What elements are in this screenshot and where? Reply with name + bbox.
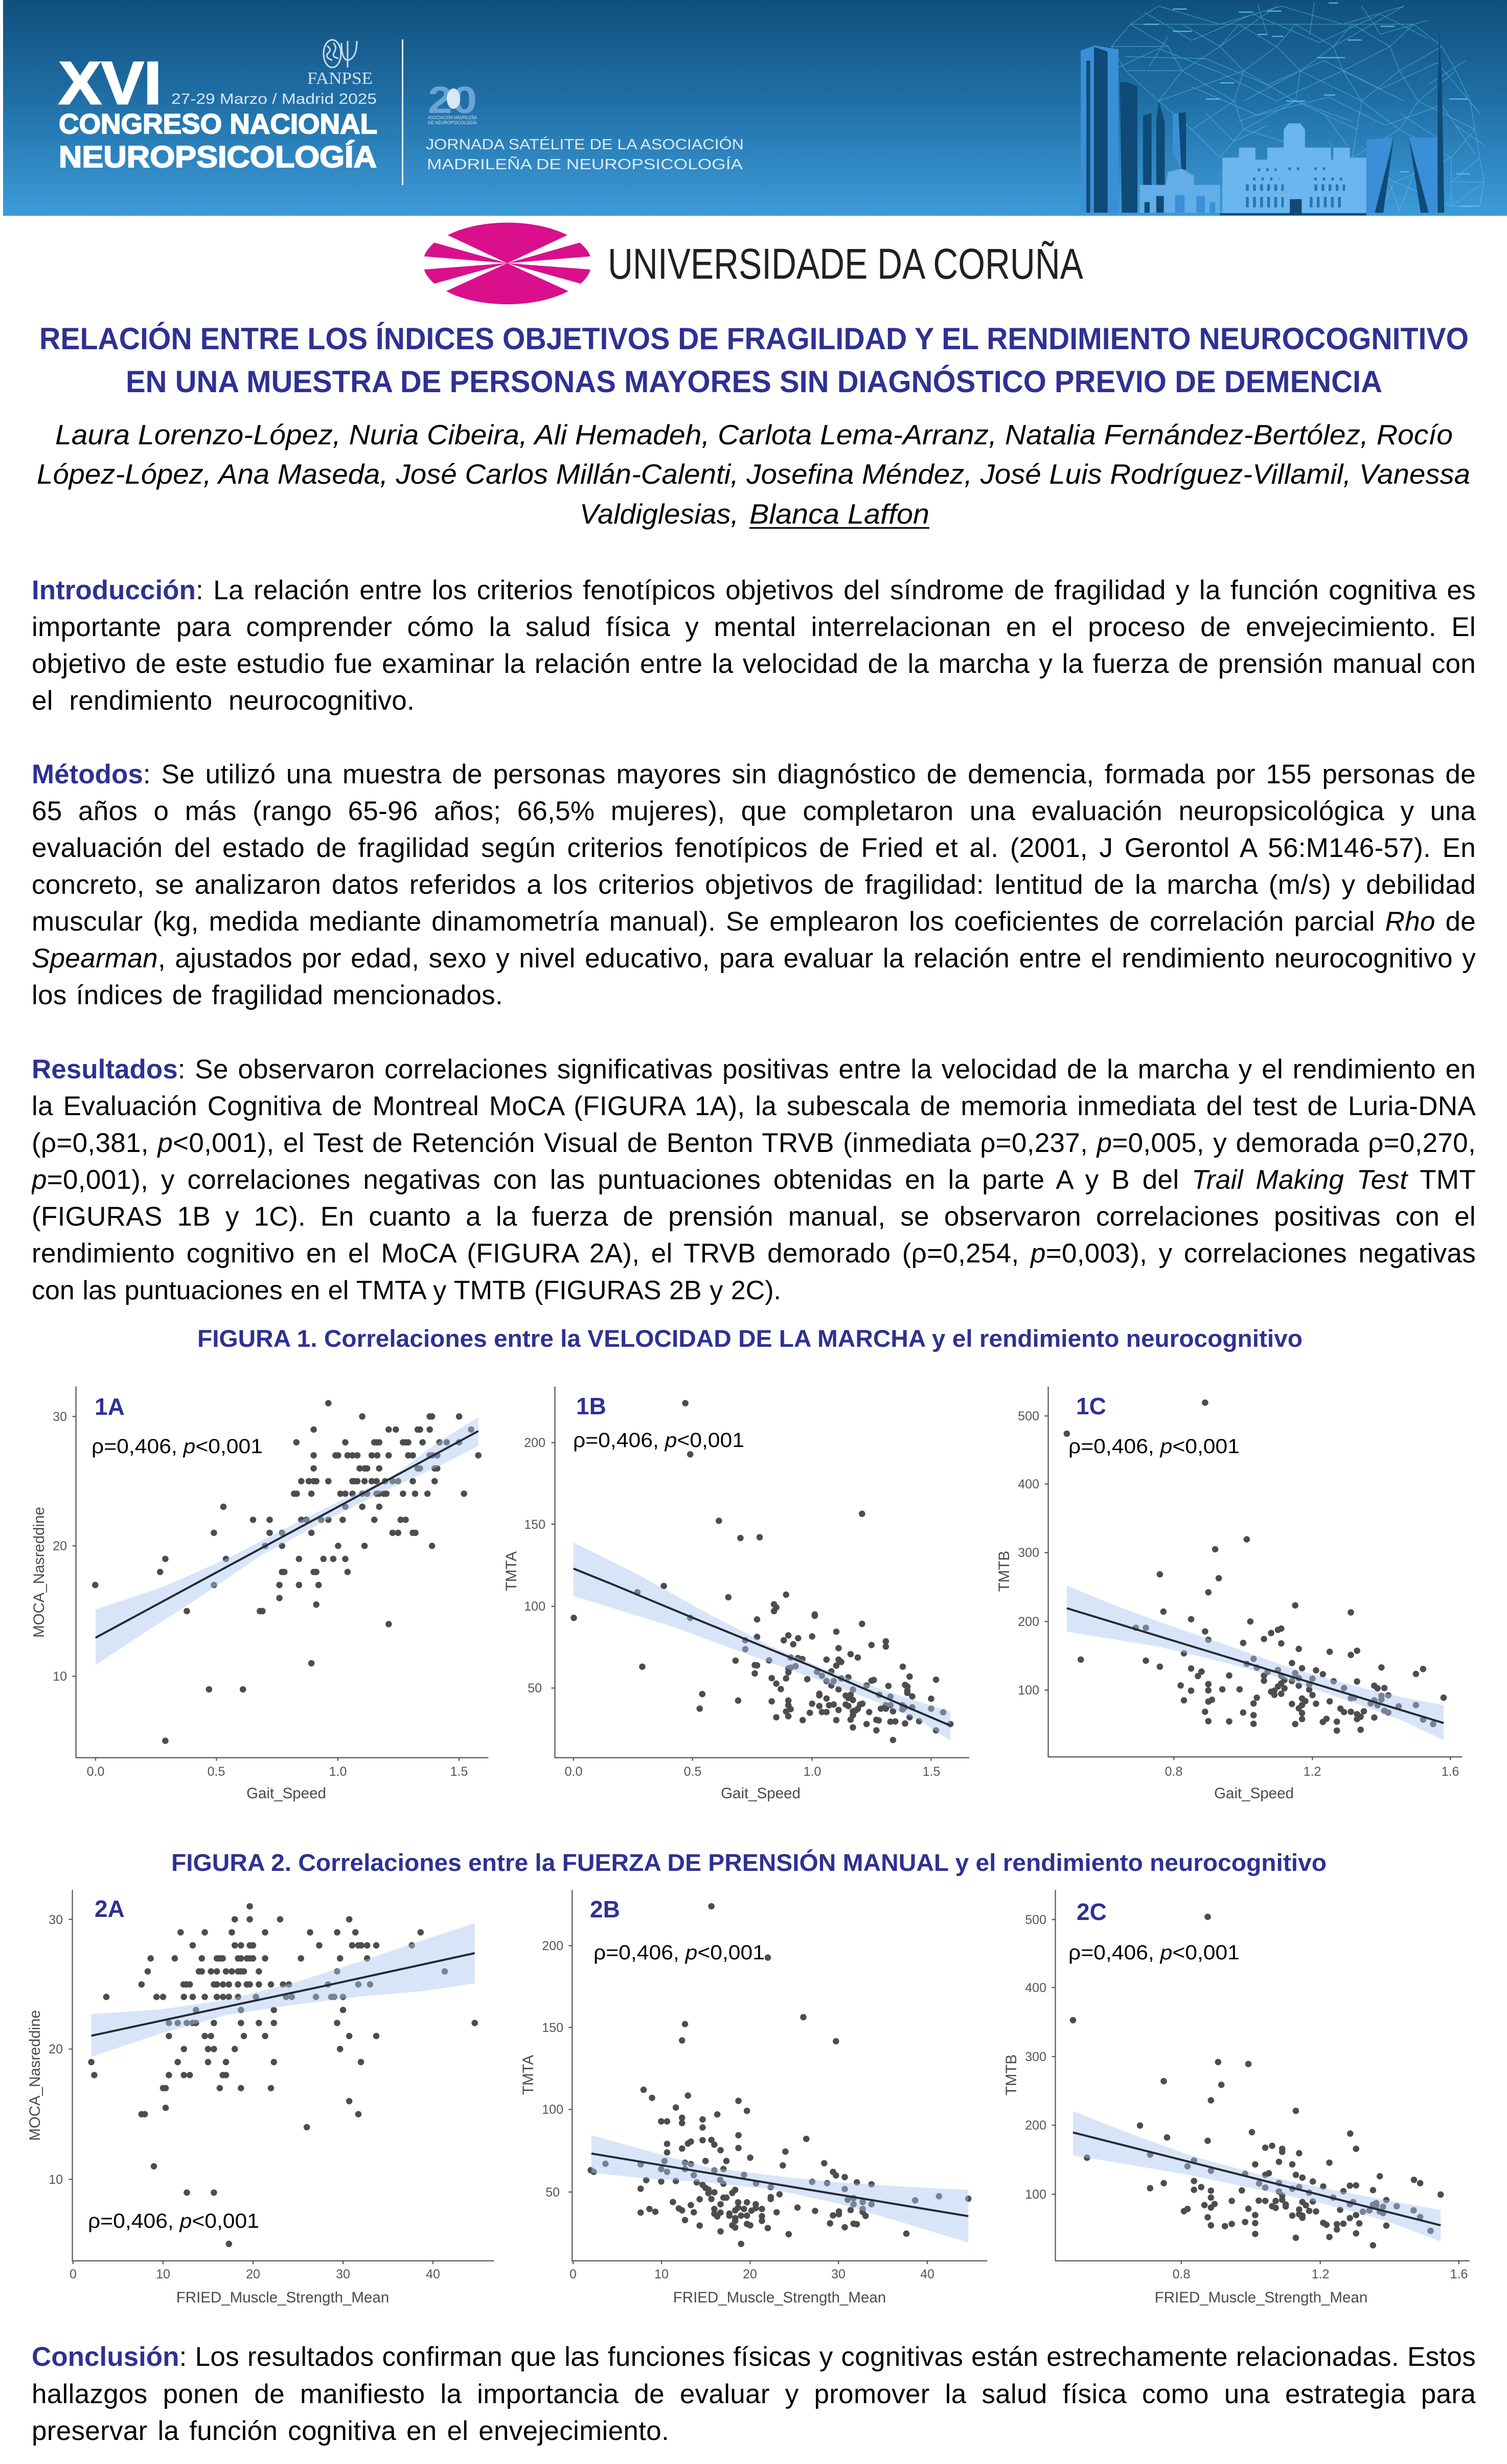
y axis title: MOCA_Nasreddine	[31, 1507, 48, 1638]
header artwork and congress text	[58, 2, 1485, 216]
y tick labels: 300	[1025, 2050, 1046, 2064]
x tick labels: 0.8	[1173, 2267, 1190, 2281]
axes and ticks	[69, 1890, 494, 2264]
axes and ticks	[1045, 1387, 1462, 1760]
y tick labels: 400	[1025, 1981, 1046, 1995]
y tick labels: 10	[53, 1669, 67, 1684]
panel tag: 1A	[95, 1393, 125, 1420]
axes and ticks	[1052, 1890, 1470, 2264]
x axis title: Gait_Speed	[1214, 1785, 1294, 1802]
y tick labels: 200	[542, 1939, 563, 1953]
correlation label: ρ=0,406, p<0,001	[1068, 1941, 1240, 1964]
conclusion text: Conclusión: Los resultados confirman que las funciones físicas y cognitivas están estrechamente relacionadas. Estos	[32, 2342, 1476, 2372]
chart 2C: muscle strength vs TMTB	[997, 1882, 1507, 2316]
y tick labels: 150	[542, 2021, 563, 2035]
icon: 20 years logo: 20	[428, 79, 477, 121]
results text: p=0,001), y correlaciones negativas con las puntuaciones obtenidas en la parte A y B del Trail Making Test TMT	[32, 1165, 1476, 1195]
results text: rendimiento cognitivo en el MoCA (FIGURA 2A), el TRVB demorado (ρ=0,254, p=0,003), y correlaciones negativas	[32, 1238, 1476, 1269]
y tick labels	[49, 1913, 63, 2187]
x tick labels: 0.5	[208, 1765, 225, 1779]
x tick labels: 40	[920, 2267, 934, 2281]
scatter points	[92, 1906, 475, 2244]
results text: (ρ=0,381, p<0,001), el Test de Retención Visual de Benton TRVB (inmediata ρ=0,237, p=0,005, y demorada ρ=0,270,	[32, 1128, 1476, 1158]
x tick labels: 1.5	[450, 1765, 468, 1779]
satellite session line 1: JORNADA SATÉLITE DE LA ASOCIACIÓN	[426, 136, 744, 153]
y axis title: TMTB	[996, 1551, 1013, 1592]
x tick labels: 20	[246, 2267, 260, 2281]
icon: 20 years logo: DE NEUROPSICOLOGÍA	[428, 120, 477, 125]
confidence band	[591, 2135, 968, 2243]
results text	[32, 1054, 1476, 1305]
regression line	[96, 1431, 478, 1638]
correlation label: ρ=0,406, p<0,001	[88, 2210, 259, 2232]
introduction text: importante para comprender cómo la salud física y mental interrelacionan en el proceso de envejecimiento. El	[32, 612, 1476, 642]
y tick labels: 400	[1018, 1477, 1039, 1491]
scatter points	[574, 1403, 950, 1740]
x tick labels: 10	[654, 2267, 669, 2281]
chart 2B: muscle strength vs TMTA	[511, 1882, 997, 2316]
conclusion text	[32, 2339, 1476, 2450]
panel tag: 2B	[590, 1896, 620, 1923]
correlation label: ρ=0,406, p<0,001	[92, 1435, 263, 1458]
x tick labels: 1.0	[329, 1765, 347, 1779]
x tick labels	[1173, 2267, 1468, 2281]
y tick labels: 20	[53, 1539, 67, 1553]
methods text: evaluación del estado de fragilidad según criterios fenotípicos de Fried et al. (2001, J Gerontol A 56:M146-57). En	[32, 833, 1476, 863]
x tick labels: 40	[426, 2267, 440, 2281]
x tick labels: 0	[70, 2267, 77, 2281]
methods text: los índices de fragilidad mencionados.	[32, 980, 503, 1010]
axes and ticks	[551, 1387, 969, 1761]
x tick labels: 0.0	[565, 1765, 582, 1779]
regression line	[574, 1569, 950, 1726]
title line 1: RELACIÓN ENTRE LOS ÍNDICES OBJETIVOS DE FRAGILIDAD Y EL RENDIMIENTO NEUROCOGNITIVO	[39, 322, 1469, 356]
y tick labels: 100	[1018, 1683, 1039, 1698]
methods text: concreto, se analizaron datos referidos a los criterios objetivos de fragilidad: lentitud de la marcha (m/s) y debilidad	[32, 870, 1476, 900]
figure 1 heading: FIGURA 1. Correlaciones entre la VELOCIDAD DE LA MARCHA y el rendimiento neurocognitivo	[197, 1325, 1303, 1352]
icon: UDC emblem	[424, 222, 590, 304]
presenting author: Blanca Laffon	[749, 498, 929, 530]
FANPSE wordmark: FANPSE	[307, 69, 373, 88]
introduction text: objetivo de este estudio fue examinar la relación entre la velocidad de la marcha y la fuerza de prensión manual con	[32, 649, 1476, 679]
x tick labels: 1.2	[1304, 1765, 1321, 1779]
y tick labels: 200	[1018, 1615, 1039, 1629]
methods text: muscular (kg, medida mediante dinamometría manual). Se emplearon los coeficientes de correlación parcial Rho de	[32, 907, 1476, 937]
y axis title: TMTA	[520, 2055, 537, 2095]
congress name line 1: CONGRESO NACIONAL	[59, 108, 377, 140]
panel tag: 1B	[576, 1393, 606, 1419]
authors line 2: López-López, Ana Maseda, José Carlos Millán-Calenti, Josefina Méndez, José Luis Rodríguez-Villamil, Vanessa	[37, 458, 1470, 490]
Madrid skyline illustration	[1081, 2, 1485, 215]
congress name line 2: NEUROPSICOLOGÍA	[59, 140, 377, 174]
regression line	[1073, 2133, 1441, 2225]
results text: la Evaluación Cognitiva de Montreal MoCA (FIGURA 1A), la subescala de memoria inmediata del test de Luria-DNA	[32, 1091, 1476, 1121]
y tick labels	[524, 1436, 545, 1696]
axes and ticks	[73, 1387, 488, 1761]
header banner	[3, 0, 1507, 216]
x axis title: FRIED_Muscle_Strength_Mean	[176, 2289, 389, 2306]
axes and ticks	[568, 1890, 987, 2264]
x tick labels: 1.2	[1312, 2267, 1329, 2281]
introduction text	[32, 575, 1476, 716]
y tick labels: 100	[524, 1599, 545, 1614]
methods text: Métodos: Se utilizó una muestra de personas mayores sin diagnóstico de demencia, formada por 155 personas de	[32, 759, 1476, 789]
confidence band	[1067, 1586, 1444, 1740]
y axis title: TMTB	[1003, 2054, 1020, 2095]
x axis title: Gait_Speed	[246, 1785, 326, 1802]
x tick labels: 0	[569, 2267, 577, 2281]
y tick labels: 20	[49, 2042, 63, 2056]
authors line 3: Valdiglesias,	[580, 498, 739, 530]
authors	[37, 419, 1470, 530]
university name: UNIVERSIDADE DA CORUÑA	[608, 240, 1083, 288]
regression line	[1067, 1608, 1444, 1723]
x tick labels: 1.5	[923, 1765, 940, 1779]
y tick labels	[1025, 1913, 1046, 2202]
x tick labels: 0.5	[684, 1765, 701, 1779]
y tick labels	[542, 1939, 563, 2200]
regression line	[92, 1953, 475, 2036]
scatter points	[591, 1906, 968, 2244]
confidence band	[96, 1417, 478, 1665]
regression line	[591, 2154, 968, 2216]
x tick labels	[70, 2267, 440, 2281]
x tick labels	[87, 1765, 468, 1779]
methods text	[32, 759, 1476, 1010]
x tick labels: 30	[336, 2267, 350, 2281]
confidence band	[574, 1543, 950, 1740]
poster title	[39, 322, 1469, 399]
panel tag: 2C	[1077, 1898, 1107, 1925]
y tick labels: 100	[542, 2103, 563, 2117]
conclusion text: hallazgos ponen de manifiesto la importancia de evaluar y promover la salud física como una estrategia para	[32, 2379, 1476, 2409]
correlation label: ρ=0,406, p<0,001	[1068, 1435, 1240, 1458]
conclusion text: preservar la función cognitiva en el envejecimiento.	[32, 2416, 669, 2446]
x tick labels: 20	[743, 2267, 757, 2281]
y axis title: MOCA_Nasreddine	[27, 2010, 43, 2141]
x tick labels: 10	[156, 2267, 170, 2281]
results text: con las puntuaciones en el TMTA y TMTB (FIGURAS 2B y 2C).	[32, 1276, 781, 1305]
chart 1A: gait speed vs MoCA	[31, 1387, 489, 1802]
x tick labels	[565, 1765, 940, 1779]
chart 2A: muscle strength vs MoCA	[0, 1882, 511, 2316]
x tick labels: 0.0	[87, 1765, 104, 1779]
x tick labels: 1.6	[1450, 2267, 1468, 2281]
chart 1B: gait speed vs TMTA	[503, 1387, 969, 1802]
y tick labels: 200	[1025, 2118, 1046, 2133]
x axis title: Gait_Speed	[721, 1785, 801, 1802]
y tick labels: 300	[1018, 1546, 1039, 1560]
network mesh	[1111, 2, 1485, 210]
y tick labels: 500	[1025, 1913, 1046, 1927]
x tick labels: 0.8	[1165, 1765, 1182, 1779]
introduction text: Introducción: La relación entre los criterios fenotípicos objetivos del síndrome de fragilidad y la función cognitiva es	[32, 575, 1476, 605]
figure 2 heading: FIGURA 2. Correlaciones entre la FUERZA DE PRENSIÓN MANUAL y el rendimiento neurocognitivo	[171, 1849, 1327, 1876]
Kio towers	[1366, 138, 1437, 213]
x tick labels	[1165, 1765, 1459, 1779]
correlation label: ρ=0,406, p<0,001	[573, 1429, 744, 1452]
vertical divider	[402, 39, 403, 185]
confidence band	[1073, 2111, 1441, 2242]
x tick labels: 30	[831, 2267, 846, 2281]
x tick labels	[569, 2267, 934, 2281]
y tick labels: 50	[528, 1681, 542, 1696]
y tick labels	[53, 1410, 67, 1684]
icon: FANPSE brain and psi	[324, 40, 357, 67]
x tick labels: 1.0	[804, 1765, 821, 1779]
scatter points	[1073, 1917, 1441, 2245]
y tick labels: 100	[1025, 2187, 1046, 2202]
authors line 1: Laura Lorenzo-López, Nuria Cibeira, Ali Hemadeh, Carlota Lema-Arranz, Natalia Fernández-Bertólez, Rocío	[55, 419, 1453, 450]
x tick labels: 1.6	[1442, 1765, 1459, 1779]
congress number: XVI	[59, 50, 162, 117]
y tick labels: 150	[524, 1518, 545, 1532]
university logo	[424, 222, 1083, 305]
x axis title: FRIED_Muscle_Strength_Mean	[673, 2289, 886, 2306]
low building	[1140, 169, 1220, 213]
y tick labels: 50	[545, 2185, 560, 2200]
introduction text: el rendimiento neurocognitivo.	[32, 686, 415, 716]
Cibeles palace	[1222, 123, 1366, 213]
scatter points	[95, 1403, 478, 1740]
scatter points	[1067, 1403, 1444, 1731]
y tick labels: 200	[524, 1436, 545, 1450]
y tick labels: 30	[53, 1410, 67, 1424]
methods text: Spearman, ajustados por edad, sexo y nivel educativo, para evaluar la relación entre el rendimiento neurocognitivo y	[32, 943, 1476, 974]
congress dates: 27-29 Marzo / Madrid 2025	[171, 91, 377, 107]
results text: (FIGURAS 1B y 1C). En cuanto a la fuerza de prensión manual, se observaron correlaciones positivas con el	[32, 1202, 1476, 1232]
title line 2: EN UNA MUESTRA DE PERSONAS MAYORES SIN DIAGNÓSTICO PREVIO DE DEMENCIA	[126, 365, 1382, 399]
y tick labels: 500	[1018, 1409, 1039, 1423]
confidence band	[92, 1923, 475, 2057]
correlation label: ρ=0,406, p<0,001	[593, 1941, 765, 1964]
y tick labels: 10	[49, 2173, 63, 2187]
results text: Resultados: Se observaron correlaciones significativas positivas entre la velocidad de la marcha y el rendimiento en	[32, 1054, 1476, 1084]
y tick labels	[1018, 1409, 1039, 1698]
panel tag: 2A	[95, 1895, 125, 1922]
y axis title: TMTA	[503, 1551, 520, 1591]
satellite session line 2: MADRILEÑA DE NEUROPSICOLOGÍA	[427, 155, 743, 173]
chart 1C: gait speed vs TMTB	[997, 1370, 1507, 1810]
bright node dashes	[1145, 3, 1479, 206]
methods text: 65 años o más (rango 65-96 años; 66,5% mujeres), que completaron una evaluación neuropsicológica y una	[32, 796, 1476, 826]
x axis title: FRIED_Muscle_Strength_Mean	[1155, 2289, 1367, 2306]
y tick labels: 30	[49, 1913, 63, 1927]
icon: 20 years logo: ASOCIACIÓN MADRILEÑA	[428, 115, 477, 120]
glass towers	[1081, 46, 1118, 213]
panel tag: 1C	[1076, 1393, 1106, 1419]
